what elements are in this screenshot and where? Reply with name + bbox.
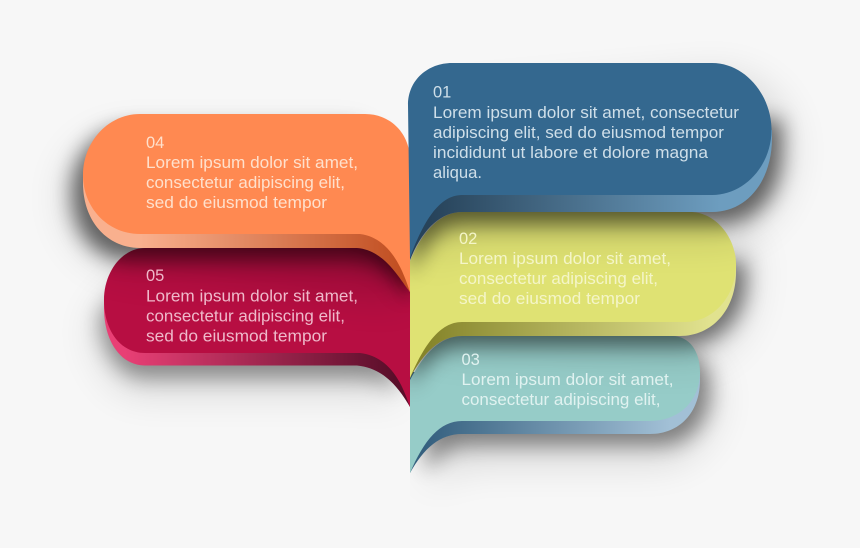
text: 02: consectetur adipiscing elit, xyxy=(459,270,658,288)
text: 02: Lorem ipsum dolor sit amet, xyxy=(459,250,671,268)
text: 01: incididunt ut labore et dolore magna xyxy=(433,144,709,162)
text: 01: aliqua. xyxy=(433,164,482,182)
text: 01 xyxy=(433,84,740,182)
text: 05: sed do eiusmod tempor xyxy=(146,328,328,346)
panel: 04 orange bubble xyxy=(66,114,410,300)
text: 01: 01 xyxy=(433,84,451,102)
text: 04 xyxy=(146,134,358,212)
panel: 03 teal bubble xyxy=(410,336,716,490)
text: 05: 05 xyxy=(146,267,164,285)
text: 03: consectetur adipiscing elit, xyxy=(462,391,660,409)
panel: 05 crimson bubble xyxy=(94,248,410,407)
text: 03 xyxy=(462,351,674,409)
text: 03: 03 xyxy=(462,351,480,369)
text: 03: Lorem ipsum dolor sit amet, xyxy=(462,371,674,389)
text: 04: Lorem ipsum dolor sit amet, xyxy=(146,154,358,172)
text: 02 xyxy=(459,230,671,308)
text: 04: consectetur adipiscing elit, xyxy=(146,174,345,192)
text: 02: 02 xyxy=(459,230,477,248)
text: 05: Lorem ipsum dolor sit amet, xyxy=(146,288,358,306)
text: 05: consectetur adipiscing elit, xyxy=(146,308,345,326)
text: 04: sed do eiusmod tempor xyxy=(146,194,328,212)
panel: 02 yellow bubble xyxy=(410,212,752,388)
panel: 01 blue bubble xyxy=(408,63,790,276)
text: 01: adipiscing elit, sed do eiusmod tempor xyxy=(433,124,725,142)
text: 01: Lorem ipsum dolor sit amet, consectetur xyxy=(433,104,740,122)
text: 02: sed do eiusmod tempor xyxy=(459,290,641,308)
text: 05 xyxy=(146,267,358,346)
text: 04: 04 xyxy=(146,134,164,152)
